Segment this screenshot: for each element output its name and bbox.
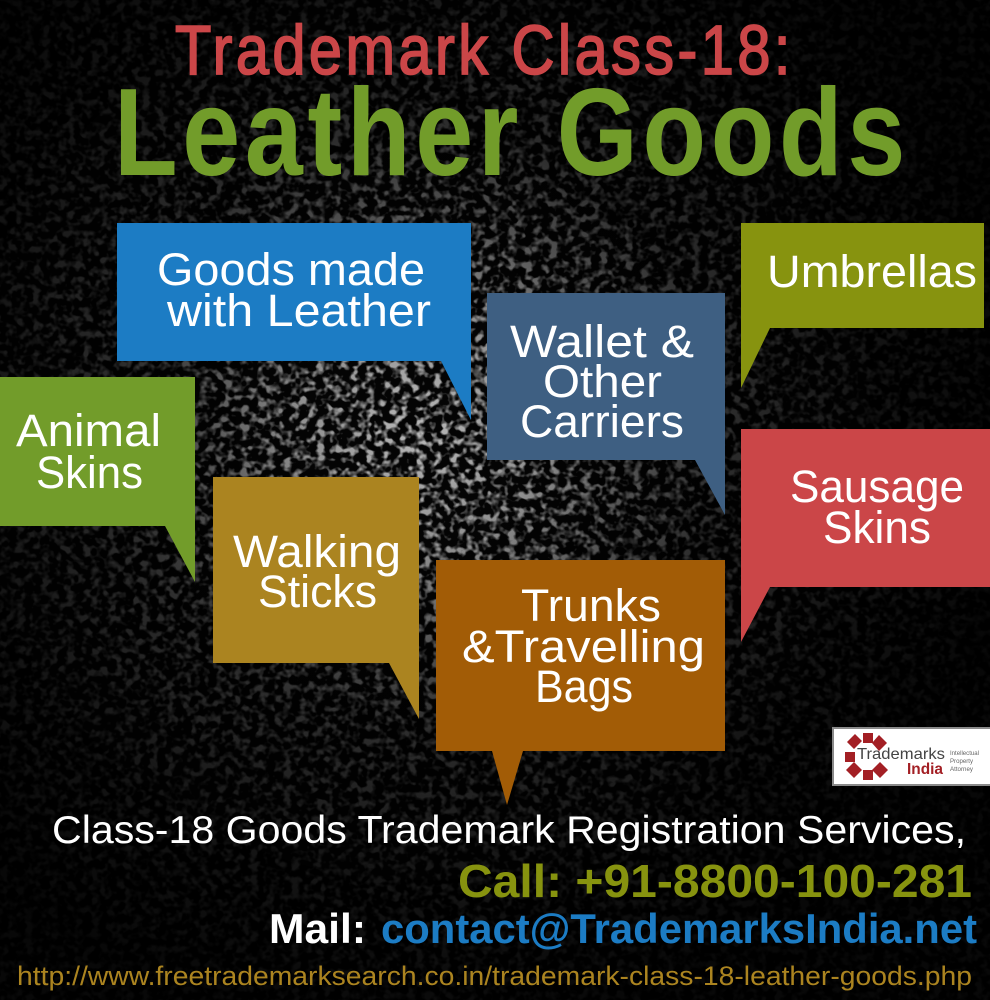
bubble: Trunks and Travelling Bags xyxy=(436,560,725,805)
text: services line: Class-18 Goods Trademark Registration Services, xyxy=(52,809,966,852)
text: mail: contact@TrademarksIndia.net xyxy=(381,905,977,952)
bubble: Walking Sticks xyxy=(213,477,419,719)
bubble: Goods made with Leather xyxy=(117,223,471,420)
bubble: Wallet and Other Carriers: Wallet & xyxy=(510,316,694,367)
bubble: Trunks and Travelling Bags: &Travelling xyxy=(462,621,705,672)
bubble: Walking Sticks: Walking xyxy=(233,526,401,577)
bubble: Goods made with Leather: Goods made xyxy=(157,244,425,295)
bubble: Wallet and Other Carriers: Carriers xyxy=(520,396,684,447)
bubble: Sausage Skins xyxy=(741,429,990,642)
bubble: Trunks and Travelling Bags: Trunks xyxy=(521,580,661,631)
bubble: Walking Sticks: Sticks xyxy=(258,566,377,617)
logo: Trademarks India: Trademarks xyxy=(857,746,945,763)
bubble: Sausage Skins: Skins xyxy=(823,502,931,553)
text: mail: Mail: xyxy=(269,905,366,952)
logo: Trademarks India: Property xyxy=(950,759,973,765)
logo: Trademarks India: India xyxy=(907,761,943,778)
title: Trademark Class-18: Trademark Class-18: xyxy=(175,10,790,89)
bubble: Goods made with Leather: with Leather xyxy=(166,285,431,336)
bubble: Trunks and Travelling Bags: Bags xyxy=(535,661,633,712)
bubble: Sausage Skins: Sausage xyxy=(790,461,964,512)
icon: logo diamonds xyxy=(845,733,888,780)
bubble: Umbrellas: Umbrellas xyxy=(767,246,977,297)
logo: Trademarks India: Attorney xyxy=(950,767,973,773)
bubble: Umbrellas xyxy=(741,223,984,388)
bubble: Animal Skins: Animal xyxy=(16,405,161,456)
text: phone: Call: +91-8800-100-281 xyxy=(458,855,972,907)
heading: Leather Goods: Leather Goods xyxy=(114,63,905,202)
bubble: Wallet and Other Carriers xyxy=(487,293,725,515)
bubble: Wallet and Other Carriers: Other xyxy=(543,356,662,407)
text: website url: http://www.freetrademarksearch.co.in/trademark-class-18-leather-goods.php xyxy=(17,961,972,991)
logo: Trademarks India xyxy=(833,728,990,785)
bubble: Animal Skins xyxy=(0,377,195,582)
bubble: Animal Skins: Skins xyxy=(36,447,143,498)
logo: Trademarks India: Intellectual xyxy=(950,751,979,757)
